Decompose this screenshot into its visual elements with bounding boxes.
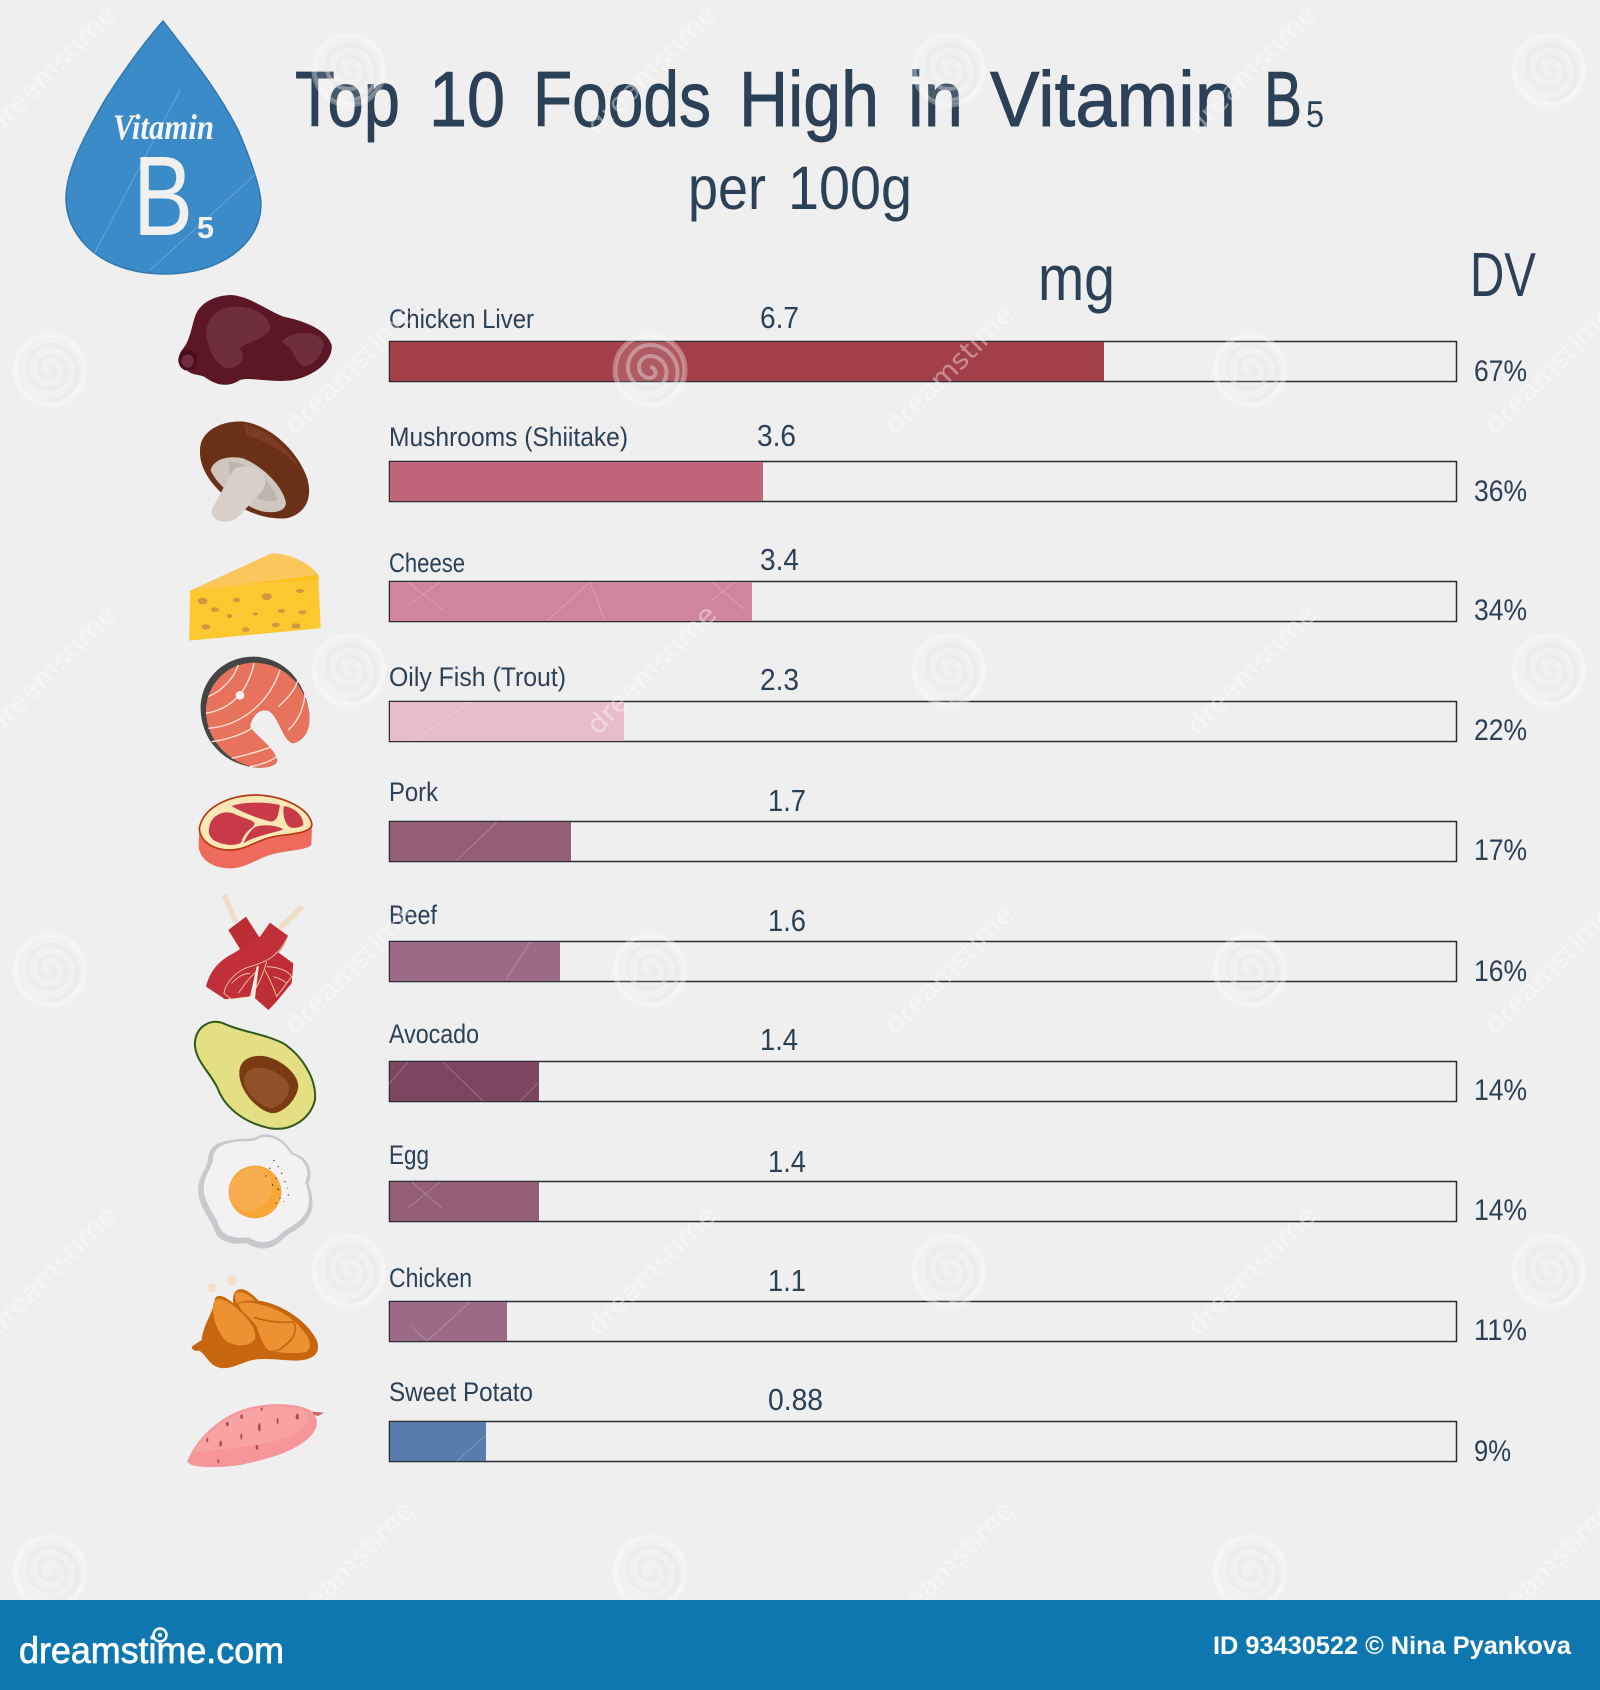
row: Chicken Liver [389, 300, 1527, 388]
icon: avocado [195, 1022, 315, 1129]
value: 0.88 mg: 0.88 [768, 1382, 823, 1417]
title: in [908, 55, 963, 143]
title: 10 [429, 55, 505, 143]
icon: sweet potato [187, 1404, 324, 1467]
row: Cheese [389, 542, 1527, 627]
text: dreamstime [581, 0, 723, 141]
icon: salmon steak [201, 657, 310, 768]
row: Chicken [389, 1263, 1527, 1347]
value: 1.4 mg: 1.4 [760, 1022, 798, 1057]
text: dreamstime [279, 299, 421, 441]
bar: Chicken Liver [390, 342, 1456, 382]
value: 9% DV: 9% [1474, 1435, 1511, 1468]
label: Pork: Pork [389, 777, 438, 807]
bar: Sweet Potato [390, 1422, 1456, 1462]
row: Sweet Potato [389, 1377, 1511, 1468]
label: Oily Fish (Trout): Oily Fish (Trout) [389, 662, 566, 692]
text: dreamstime [879, 299, 1021, 441]
footer logo: dreamstime.com [19, 1630, 284, 1671]
value: 1.1 mg: 1.1 [768, 1263, 806, 1298]
row: Egg [389, 1140, 1527, 1227]
value: 36% DV: 36% [1474, 475, 1527, 508]
icon: cheese [189, 553, 321, 641]
text: dreamstime [279, 899, 421, 1041]
footer band [0, 1600, 1600, 1690]
text: dreamstime [879, 1495, 1021, 1637]
bar: Mushrooms [390, 462, 1456, 502]
title: B [1264, 55, 1302, 143]
title: Vitamin [990, 55, 1236, 143]
bar: Pork [390, 822, 1456, 862]
icon: chicken liver [178, 295, 332, 385]
icon: fried egg [198, 1134, 312, 1249]
title: High [739, 55, 879, 143]
title [295, 55, 1324, 143]
value: 1.6 mg: 1.6 [768, 903, 806, 938]
value: 14% DV: 14% [1474, 1074, 1527, 1107]
label: Cheese: Cheese [389, 548, 465, 578]
bar: Oily Fish [390, 702, 1456, 742]
value: 14% DV: 14% [1474, 1194, 1527, 1227]
label: Avocado: Avocado [389, 1019, 479, 1049]
value: 16% DV: 16% [1474, 955, 1527, 988]
text: dreamstime [1181, 599, 1323, 741]
value: 22% DV: 22% [1474, 714, 1527, 747]
row: Pork [389, 777, 1527, 867]
value: 34% DV: 34% [1474, 594, 1527, 627]
bar: Avocado [390, 1062, 1456, 1102]
text: dreamstime [581, 599, 723, 741]
label: Chicken Liver: Chicken Liver [389, 304, 534, 334]
label: Chicken: Chicken [389, 1263, 472, 1293]
icon: vitamin B5 drop: B [133, 133, 193, 259]
subtitle: 100g [788, 154, 912, 222]
icon: vitamin B5 drop: Vitamin [113, 107, 214, 147]
row: Beef [389, 900, 1527, 988]
bar: Cheese [390, 582, 1456, 622]
text: dreamstime [879, 899, 1021, 1041]
column heading: mg: mg [1038, 242, 1115, 314]
icon: vitamin B5 drop: 5 [197, 210, 214, 245]
value: 11% DV: 11% [1474, 1314, 1527, 1347]
icon: beef chops [206, 897, 301, 1010]
text: dreamstime [279, 1495, 421, 1637]
value: 3.4 mg: 3.4 [760, 542, 799, 577]
subtitle: per [688, 154, 766, 222]
row: Avocado [389, 1019, 1527, 1107]
value: 1.7 mg: 1.7 [768, 783, 806, 818]
label: Beef: Beef [389, 900, 437, 930]
value: 1.4 mg: 1.4 [768, 1144, 806, 1179]
text: dreamstime [1181, 0, 1323, 141]
label: Sweet Potato: Sweet Potato [389, 1377, 533, 1407]
text: dreamstime [581, 1200, 723, 1342]
bar: Egg [390, 1182, 1456, 1222]
title: 5 [1306, 94, 1324, 135]
subtitle [688, 154, 912, 222]
value: 3.6 mg: 3.6 [757, 418, 796, 453]
value: 67% DV: 67% [1474, 355, 1527, 388]
icon: shiitake mushroom [200, 421, 309, 522]
icon: vitamin B5 drop [66, 21, 261, 274]
bar: Chicken [390, 1302, 1456, 1342]
text: dreamstime [1181, 1200, 1323, 1342]
icon: pork steak [199, 795, 312, 868]
value: 6.7 mg: 6.7 [760, 300, 799, 335]
column heading: DV: DV [1470, 241, 1536, 310]
bar: Beef [390, 942, 1456, 982]
icon: roast chicken [192, 1276, 318, 1368]
title: Foods [533, 55, 711, 143]
value: 2.3 mg: 2.3 [760, 662, 799, 697]
row: Mushrooms [389, 418, 1527, 508]
value: 17% DV: 17% [1474, 834, 1527, 867]
label: Mushrooms (Shiitake): Mushrooms (Shiitake) [389, 422, 628, 452]
label: Egg: Egg [389, 1140, 429, 1170]
row: Oily Fish [389, 662, 1527, 747]
title: Top [295, 55, 400, 143]
footer credit: ID 93430522 © Nina Pyankova [1213, 1632, 1572, 1660]
